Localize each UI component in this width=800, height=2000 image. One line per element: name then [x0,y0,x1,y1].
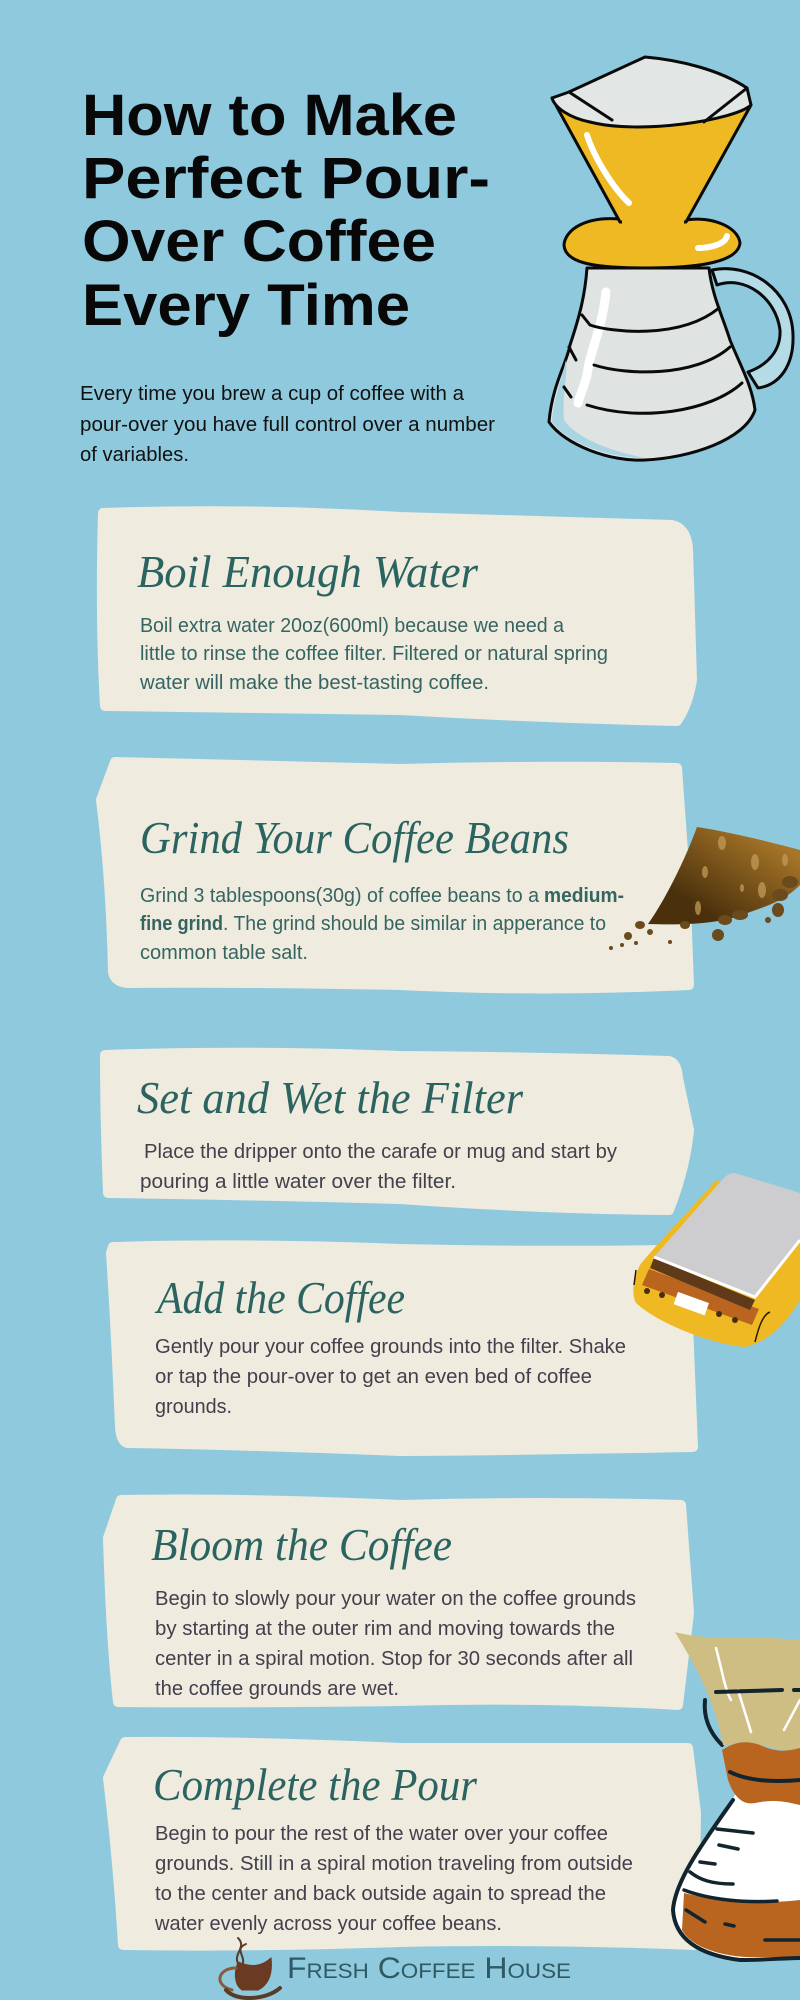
panel: bloom the coffee: Begin to slowly pour your water on the coffee grounds [155,1588,636,1610]
panel: grind your coffee beans: . The grind should be similar in apperance to [223,913,606,935]
intro text: pour-over you have full control over a number [80,414,495,436]
title: How to Make [82,83,457,148]
icon: coffee grounds pile [609,827,800,950]
panel: grind your coffee beans: fine grind [140,913,223,935]
dripper cone [552,98,751,222]
panel: set and wet the filter: Set and Wet the Filter [137,1072,524,1123]
carafe outline [673,1800,800,1960]
coffee in carafe [682,1893,800,1957]
panel: set and wet the filter: pouring a little water over the filter. [140,1171,456,1193]
panel: boil enough water [102,511,692,721]
intro text: Every time you brew a cup of coffee with a [80,383,465,405]
carafe ridges [564,308,742,413]
carafe highlight [578,292,606,403]
panel: bloom the coffee [108,1500,689,1705]
carafe handle [712,269,793,388]
title: Perfect Pour- [82,146,490,211]
icon: pour-over dripper and carafe [549,57,793,460]
panel: complete the pour: Complete the Pour [153,1759,478,1810]
panel: set and wet the filter [105,1053,689,1210]
orange collar [722,1742,800,1805]
panel: set and wet the filter: Place the dripper onto the carafe or mug and start by [144,1141,617,1163]
panel: bloom the coffee: the coffee grounds are wet. [155,1678,399,1700]
panel: complete the pour: water evenly across your coffee beans. [154,1913,502,1935]
panel: complete the pour: grounds. Still in a spiral motion traveling from outside [155,1853,633,1875]
icon: chemex carafe with filter [673,1632,800,1960]
panel: boil enough water: little to rinse the coffee filter. Filtered or natural spring [140,643,608,665]
carafe body [549,268,755,460]
dripper saucer [564,219,740,268]
intro text [80,383,495,466]
panel: add the coffee: Gently pour your coffee grounds into the filter. Shake [155,1336,626,1358]
panel: complete the pour: to the center and back outside again to spread the [155,1883,606,1905]
panel: add the coffee: grounds. [155,1396,232,1418]
paper filter [552,57,751,127]
panel: boil enough water: Boil extra water 20oz(600ml) because we need a [140,615,565,637]
panel: grind your coffee beans [101,762,689,988]
intro text: of variables. [80,444,189,466]
panel: boil enough water: Boil Enough Water [137,546,479,597]
panel: bloom the coffee: Bloom the Coffee [151,1519,452,1570]
panel: grind your coffee beans: common table salt. [140,942,308,964]
logo wordmark: Fresh Coffee House [287,1952,571,1985]
panel: bloom the coffee: by starting at the outer rim and moving towards the [155,1618,615,1640]
title: Over Coffee [82,209,436,274]
paper filter [675,1632,800,1751]
carafe shadow [552,360,645,458]
panel: add the coffee: or tap the pour-over to get an even bed of coffee [155,1366,592,1388]
panel: grind your coffee beans: Grind Your Coffee Beans [140,812,569,863]
neck wire [705,1700,722,1745]
dripper highlight [587,135,727,248]
panel: add the coffee [111,1245,693,1451]
icon: kitchen scale [633,1173,800,1347]
panel: add the coffee: Add the Coffee [154,1272,405,1323]
panel: complete the pour [108,1742,696,1946]
title: Every Time [82,273,410,338]
panel: grind your coffee beans: medium- [544,885,624,907]
carafe glass fill [673,1795,800,1960]
icon: fresh coffee house logo cup [220,1938,280,1998]
glass marks [684,1829,800,1940]
panel: boil enough water: water will make the best-tasting coffee. [139,672,489,694]
title [82,83,490,338]
panel: bloom the coffee: center in a spiral motion. Stop for 30 seconds after all [155,1648,633,1670]
panel: grind your coffee beans: Grind 3 tablespoons(30g) of coffee beans to a [140,885,540,907]
panel: complete the pour: Begin to pour the rest of the water over your coffee [155,1823,608,1845]
